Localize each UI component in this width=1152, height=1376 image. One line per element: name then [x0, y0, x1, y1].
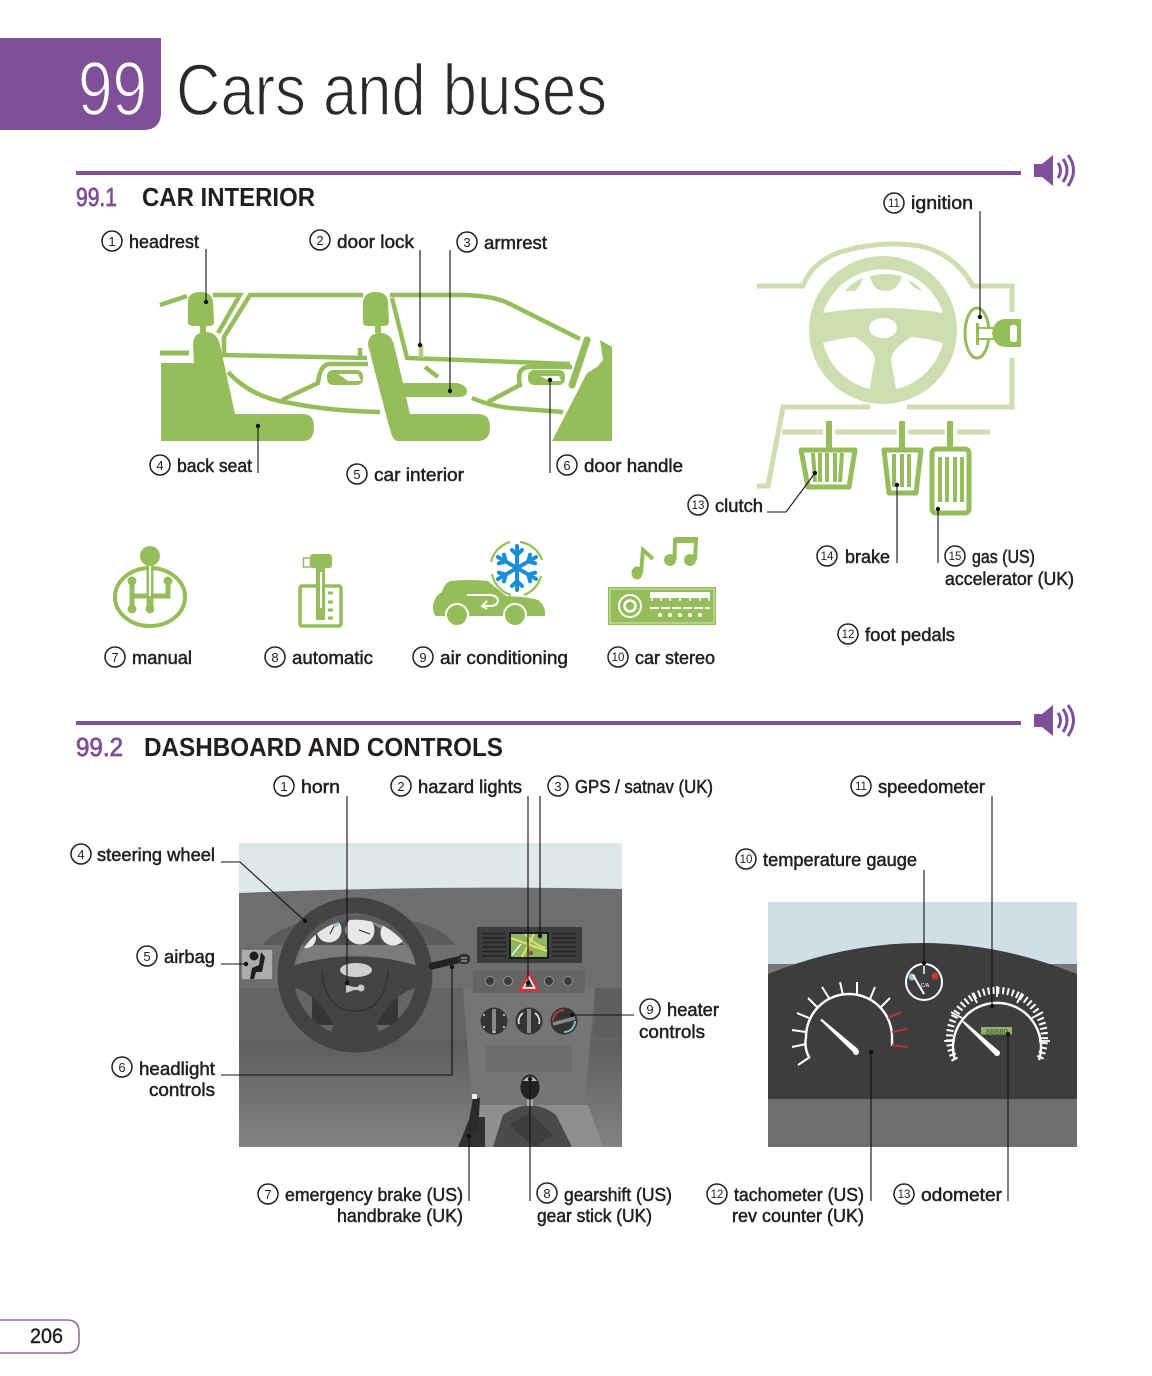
label: ignition	[884, 193, 973, 213]
leader: gas	[936, 507, 940, 563]
accelerator pedal	[932, 421, 969, 513]
label: car interior: 5	[353, 467, 361, 482]
steering column shadow	[312, 983, 398, 1025]
label: odometer: odometer	[921, 1185, 1002, 1205]
label: tachometer: 12	[711, 1189, 723, 1201]
label: back seat: back seat	[177, 456, 252, 476]
centre console	[463, 988, 595, 1105]
front seat	[368, 333, 490, 441]
leader: door lock	[418, 250, 422, 347]
odometer display: 88880	[986, 1027, 1008, 1036]
leader: armrest	[448, 250, 452, 393]
front bulkhead	[552, 340, 612, 441]
label: armrest	[457, 232, 547, 253]
icon: audio speaker 99.1	[1034, 155, 1074, 186]
label: car stereo: car stereo	[635, 648, 715, 668]
label: automatic: automatic	[292, 648, 373, 668]
instrument cluster	[296, 920, 416, 965]
icon: car stereo with notes	[608, 537, 716, 625]
label: brake	[817, 546, 890, 567]
label: air conditioning: air conditioning	[440, 648, 568, 668]
label: gas / accelerator: gas (US)	[972, 547, 1035, 567]
label: brake: brake	[845, 547, 890, 567]
airbag sign	[241, 949, 273, 980]
label: brake: 14	[821, 551, 834, 563]
dashboard outline	[757, 244, 1012, 486]
label: hazard lights: 2	[397, 779, 405, 794]
label: horn: 1	[280, 779, 288, 794]
music notes	[632, 537, 698, 580]
chapter number tab: 99	[78, 47, 147, 132]
brake pedal	[884, 421, 921, 493]
label: back seat	[150, 455, 252, 476]
snowflake	[495, 546, 539, 590]
instrument hood	[263, 915, 455, 945]
illustration: car interior	[160, 292, 612, 441]
section rule 99.2	[76, 721, 1021, 725]
label: hazard lights: hazard lights	[418, 777, 522, 797]
leader: temperature gauge	[922, 870, 926, 965]
label: gearshift	[537, 1183, 672, 1226]
icon: audio speaker 99.2	[1034, 705, 1074, 736]
label: back seat: 4	[156, 458, 164, 473]
leader: speedometer	[990, 796, 994, 1008]
leader: headrest	[204, 249, 208, 304]
temperature gauge: C/A	[921, 983, 930, 989]
label: door lock: door lock	[337, 232, 415, 252]
label: speedometer: 11	[855, 781, 867, 793]
front door handle	[528, 370, 565, 385]
steering wheel	[809, 256, 957, 404]
temperature gauge	[906, 964, 942, 1000]
section heading 99.1	[76, 182, 315, 212]
label: automatic	[265, 647, 373, 668]
chapter number tab	[0, 38, 161, 132]
label: headlight controls: 6	[118, 1060, 126, 1075]
leader: headlight controls	[221, 965, 454, 1075]
title: Cars and buses	[176, 51, 607, 131]
headlight stalk	[432, 954, 470, 966]
label: tachometer	[707, 1184, 864, 1226]
label: armrest: armrest	[484, 233, 547, 253]
leader: ignition	[978, 211, 982, 319]
GPS screen and vents	[477, 927, 582, 963]
label: headlight controls	[112, 1057, 215, 1100]
illustration: steering wheel and pedals	[757, 244, 1021, 513]
rear car frame lines	[160, 295, 380, 412]
label: emergency brake: handbrake (UK)	[337, 1206, 463, 1226]
leader: gearshift	[528, 1077, 532, 1201]
label: heater controls: 9	[646, 1002, 654, 1017]
page number tab: 206	[30, 1325, 63, 1348]
label: emergency brake: emergency brake (US)	[285, 1185, 463, 1205]
label: ignition: ignition	[911, 193, 973, 213]
gear stick	[493, 1074, 572, 1147]
label: car interior	[347, 464, 464, 485]
label: headrest: headrest	[129, 232, 199, 252]
illustration: instrument gauges	[768, 902, 1077, 1147]
label: steering wheel: 4	[77, 847, 85, 862]
front headrest	[363, 292, 389, 333]
label: door lock	[310, 230, 415, 252]
label: car interior: car interior	[374, 465, 464, 485]
label: tachometer: rev counter (UK)	[732, 1206, 864, 1226]
leader: back seat	[256, 424, 260, 473]
label: GPS / satnav: GPS / satnav (UK)	[575, 777, 713, 797]
label: gas / accelerator: accelerator (UK)	[945, 569, 1074, 589]
label: door handle: door handle	[584, 456, 683, 476]
label: airbag	[137, 946, 215, 967]
leader: odometer	[1006, 1032, 1010, 1201]
leader: clutch	[767, 471, 817, 512]
label: door handle: 6	[563, 458, 571, 473]
key in ignition	[965, 308, 1021, 358]
icon: automatic gearshift	[300, 554, 341, 626]
leader: hazard lights	[526, 796, 530, 985]
label: steering wheel: steering wheel	[97, 845, 215, 865]
leader: brake	[895, 483, 899, 563]
leader: steering wheel	[221, 862, 307, 923]
label: headrest: 1	[108, 234, 116, 249]
label: automatic: 8	[271, 650, 279, 665]
leader: horn	[345, 796, 349, 985]
label: headlight controls: controls	[149, 1080, 215, 1100]
label: car stereo: 10	[612, 652, 624, 664]
odometer display	[981, 1027, 1012, 1036]
leader: airbag	[221, 962, 248, 966]
label: clutch: clutch	[715, 496, 763, 516]
label: heater controls: controls	[639, 1022, 705, 1042]
section heading 99.2: DASHBOARD AND CONTROLS	[144, 732, 503, 762]
leader: heater controls	[570, 1013, 634, 1017]
leader: door handle	[548, 378, 552, 473]
label: temperature gauge: 10	[740, 854, 752, 866]
label: manual: 7	[111, 650, 119, 665]
label: gas / accelerator: 15	[949, 551, 961, 563]
steering column	[572, 340, 587, 385]
rear door handle	[327, 370, 363, 385]
label: airbag: airbag	[164, 947, 215, 967]
label: clutch: 13	[692, 500, 704, 512]
section heading 99.2: 99.2	[76, 732, 123, 762]
label: gearshift: gearshift (US)	[564, 1185, 672, 1205]
label: heater controls: heater	[667, 1000, 719, 1020]
label: headlight controls: headlight	[139, 1059, 215, 1079]
label: manual	[105, 647, 192, 668]
label: odometer: 13	[898, 1189, 910, 1201]
label: horn	[274, 776, 340, 797]
label: heater controls	[639, 999, 719, 1042]
label: temperature gauge: temperature gauge	[763, 850, 917, 870]
icon: air conditioning car with snowflake	[433, 542, 545, 626]
leader: emergency brake	[467, 1134, 471, 1201]
ring of arrows	[491, 542, 543, 594]
front car frame lines	[390, 295, 580, 412]
label: gearshift: gear stick (UK)	[537, 1206, 652, 1226]
label: gas / accelerator	[945, 546, 1074, 589]
label: airbag: 5	[143, 949, 151, 964]
leader: tachometer	[869, 1050, 873, 1201]
section heading 99.1: CAR INTERIOR	[142, 182, 315, 212]
back seat	[161, 332, 314, 441]
section rule 99.1	[76, 171, 1021, 175]
label: emergency brake: 7	[264, 1187, 272, 1202]
label: horn: horn	[301, 777, 340, 797]
label: emergency brake	[258, 1184, 463, 1226]
tachometer	[792, 982, 908, 1065]
label: foot pedals: foot pedals	[865, 625, 955, 645]
label: air conditioning: 9	[419, 650, 427, 665]
label: GPS / satnav: 3	[554, 779, 562, 794]
illustration: dashboard	[239, 843, 622, 1147]
label: armrest: 3	[463, 235, 471, 250]
label: foot pedals: 12	[842, 629, 854, 641]
heater knobs	[480, 1008, 578, 1034]
rear headrest	[188, 292, 214, 333]
steering wheel	[285, 906, 425, 1045]
label: tachometer: tachometer (US)	[734, 1185, 864, 1205]
label: speedometer: speedometer	[878, 777, 985, 797]
icon: manual gearshift	[115, 546, 185, 626]
label: door lock: 2	[316, 233, 324, 248]
leader: GPS	[538, 796, 542, 938]
section heading 99.1: 99.1	[76, 182, 117, 212]
label: ignition: 11	[888, 198, 900, 210]
label: manual: manual	[132, 648, 192, 668]
clutch pedal	[801, 421, 855, 487]
label: headrest	[102, 231, 199, 252]
handbrake	[458, 1094, 485, 1147]
label: odometer	[894, 1184, 1002, 1205]
label: clutch	[688, 495, 763, 516]
label: gearshift: 8	[543, 1186, 551, 1201]
page number tab	[0, 1320, 79, 1353]
hazard button strip	[473, 971, 585, 993]
speedometer	[944, 986, 1050, 1060]
